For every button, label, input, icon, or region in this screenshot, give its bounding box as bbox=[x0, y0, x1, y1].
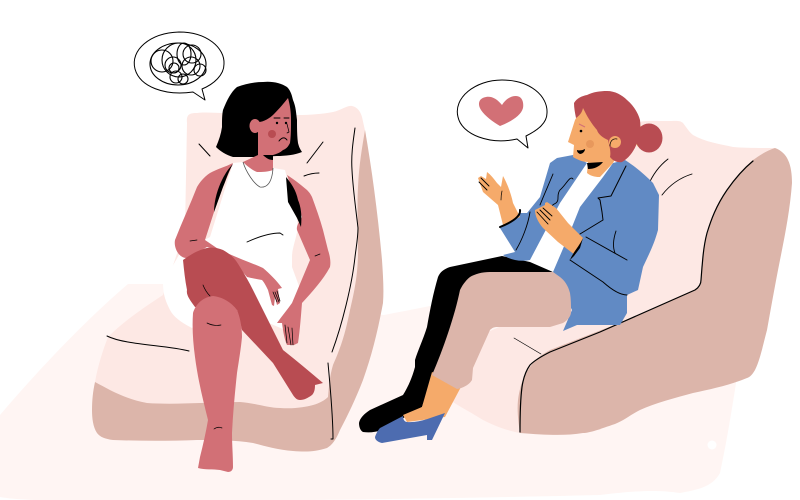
sofa: right bbox=[453, 121, 792, 435]
person: right woman bbox=[359, 91, 662, 443]
shoe: blue heel bbox=[375, 413, 445, 443]
ear line bbox=[610, 139, 617, 146]
black cuff left bbox=[500, 210, 520, 227]
sofa left: side and base bbox=[92, 130, 383, 452]
raised hand details bbox=[479, 178, 502, 200]
sofa right: seam lines bbox=[514, 159, 753, 432]
ankle bbox=[403, 372, 462, 422]
speech bubble: heart bbox=[457, 80, 547, 148]
white shirt bbox=[530, 165, 602, 272]
jacket bbox=[500, 155, 659, 331]
face and neck bbox=[568, 106, 620, 177]
hair tie bbox=[635, 125, 643, 147]
neck shadow bbox=[587, 162, 603, 169]
left arm bbox=[175, 163, 282, 306]
black trouser leg bbox=[359, 256, 553, 432]
ear bbox=[609, 136, 621, 148]
cheek bbox=[586, 140, 594, 148]
sofa right: cushion bbox=[453, 121, 775, 433]
sofa right: arm and base bbox=[518, 148, 792, 435]
hair bun bbox=[636, 124, 662, 152]
heart bbox=[479, 96, 523, 126]
neck shadow bbox=[263, 155, 273, 160]
speech bubble: tangled thoughts bbox=[134, 32, 224, 100]
black strap right bbox=[286, 177, 301, 227]
cheek bbox=[268, 130, 276, 138]
front hand finger lines bbox=[537, 208, 552, 224]
bubble outline bbox=[134, 32, 224, 100]
tan trouser leg bbox=[432, 272, 571, 389]
face details bbox=[274, 118, 289, 141]
sofa: left bbox=[92, 106, 383, 452]
person: left woman bbox=[163, 82, 330, 472]
sofa left: cushion bbox=[95, 106, 366, 420]
floor highlight dot bbox=[708, 440, 716, 450]
eyebrow bbox=[579, 124, 585, 127]
hair bbox=[574, 91, 640, 162]
top and shorts: white bbox=[163, 162, 303, 330]
necklace bbox=[243, 162, 273, 187]
jacket lines bbox=[516, 166, 627, 295]
face and neck bbox=[243, 98, 291, 172]
black cuff right bbox=[570, 238, 583, 260]
mouth bbox=[577, 149, 585, 154]
bubble outline bbox=[457, 80, 547, 148]
floor background bbox=[0, 284, 738, 500]
front hand bbox=[535, 202, 583, 255]
body crease lines bbox=[190, 233, 320, 429]
ear bbox=[250, 119, 260, 133]
eye bbox=[580, 130, 582, 132]
lower leg bbox=[193, 296, 242, 472]
thigh: dark red bbox=[183, 248, 323, 400]
raised hand bbox=[478, 172, 520, 225]
sofa left: seam lines bbox=[107, 128, 358, 439]
right arm bbox=[277, 175, 330, 345]
scribble bbox=[150, 43, 206, 85]
black strap left bbox=[214, 164, 233, 212]
hair: black bbox=[216, 82, 302, 157]
